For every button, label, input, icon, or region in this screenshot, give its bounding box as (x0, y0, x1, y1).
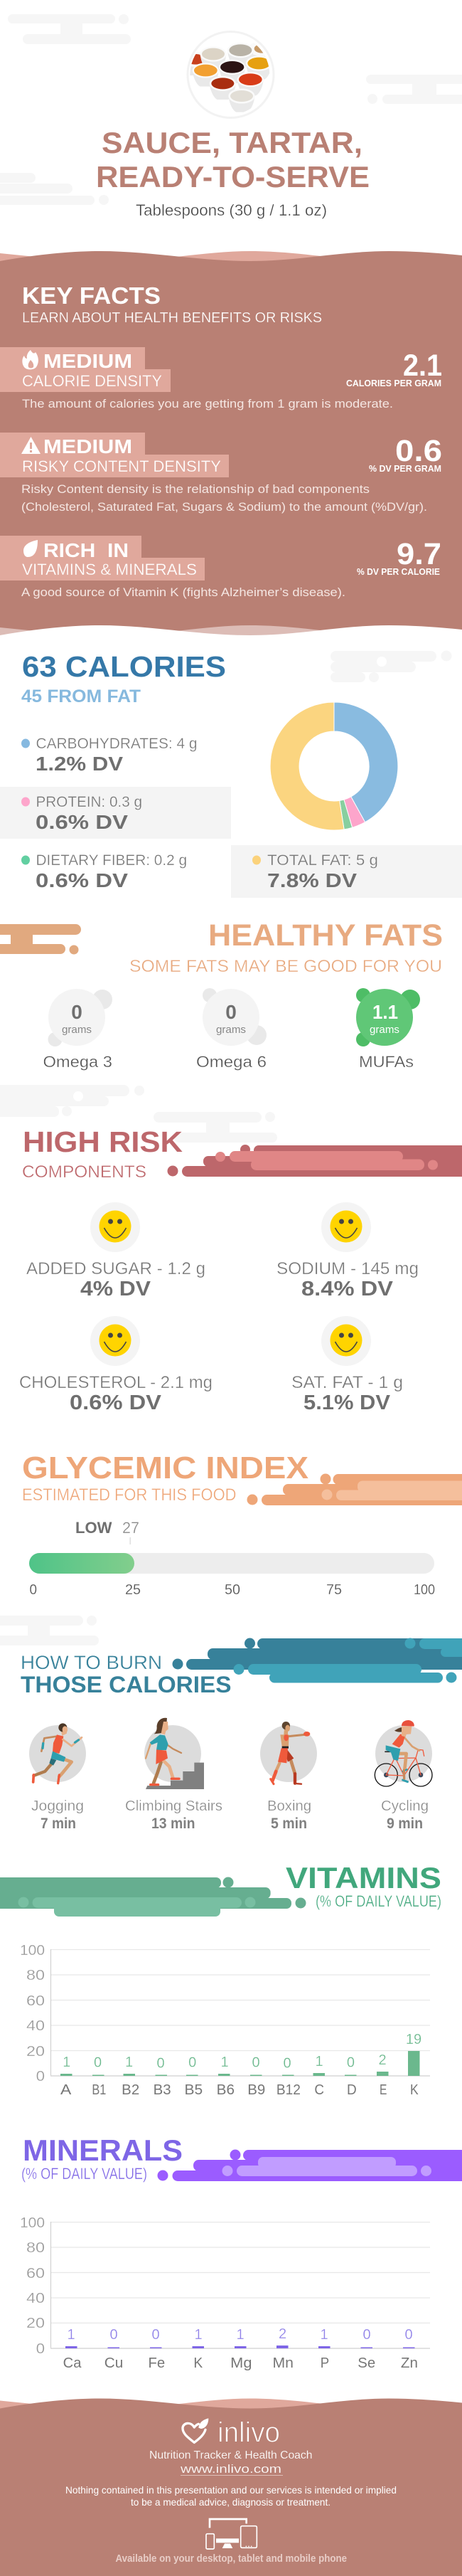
heading: minerals: MINERALS (23, 2134, 183, 2167)
component: cholesterol: CHOLESTEROL - 2.1 mg (19, 1373, 213, 1392)
bar chart: vitamins: K (410, 2082, 419, 2098)
background cloud: burn calories (0, 1616, 99, 1645)
subheading: LEARN ABOUT HEALTH BENEFITS OR RISKS (22, 310, 322, 326)
bar chart: vitamins: 0 (252, 2055, 260, 2071)
bar chart: minerals: P (321, 2355, 329, 2371)
description (21, 482, 427, 514)
bar chart: vitamins: 0 (156, 2056, 165, 2072)
bar chart: minerals: Cu (104, 2355, 123, 2371)
gauge: glycemic index: 75 (326, 1582, 342, 1598)
bar chart: minerals: 100 (20, 2215, 45, 2231)
description: A good source of Vitamin K (fights Alzheimer’s disease). (21, 585, 345, 599)
bar chart: vitamins: 2 (378, 2052, 387, 2068)
unit: dv per gram: % DV PER GRAM (369, 463, 441, 474)
heading: key facts: KEY FACTS (22, 282, 161, 309)
tagline: Nutrition Tracker & Health Coach (149, 2449, 313, 2461)
component: added sugar (26, 1202, 205, 1300)
title: READY-TO-SERVE (96, 160, 370, 194)
decorative bar: healthy fats (0, 924, 81, 955)
bar chart: minerals: 1 (320, 2327, 328, 2343)
decorative bars: minerals (158, 2150, 462, 2181)
bar chart: vitamins: B6 (217, 2082, 235, 2098)
component: added sugar: ADDED SUGAR - 1.2 g (26, 1259, 205, 1278)
bar chart: vitamins: 0 (283, 2056, 291, 2072)
component: saturated fat: 5.1% DV (303, 1392, 391, 1414)
bar chart: minerals: 40 (26, 2291, 45, 2306)
subheading: some fats: SOME FATS MAY BE GOOD FOR YOU (129, 957, 442, 976)
bar chart: vitamins: A (60, 2082, 72, 2098)
icon: warning triangle (21, 437, 41, 454)
fat: omega 3: Omega 3 (43, 1053, 112, 1071)
bar chart: vitamins: 1 (63, 2055, 70, 2070)
bar chart: vitamins: 0 (347, 2055, 355, 2071)
macro: total fat: 7.8% DV (267, 869, 357, 891)
component: saturated fat: SAT. FAT - 1 g (291, 1373, 403, 1392)
component: sodium: 8.4% DV (301, 1278, 394, 1300)
bar chart: vitamins: 1 (220, 2055, 229, 2070)
gauge: glycemic index: 25 (125, 1582, 141, 1598)
bar chart: vitamins: 1 (315, 2054, 323, 2069)
component: cholesterol: 0.6% DV (70, 1392, 162, 1414)
bar chart: vitamins: B3 (154, 2082, 171, 2098)
decorative bars: vitamins (0, 1877, 306, 1917)
heading: how to burn those calories (21, 1652, 232, 1697)
bar chart: minerals: 0 (151, 2327, 160, 2343)
bar chart: vitamins: B12 (276, 2082, 301, 2098)
bar chart: vitamins: 40 (26, 2018, 45, 2034)
bar chart: minerals: Ca (63, 2355, 82, 2371)
exercise: boxing (260, 1722, 317, 1784)
gauge: glycemic index: LOW (75, 1519, 112, 1537)
macro: total fat (231, 845, 462, 898)
decorative bars: burn calories (172, 1638, 462, 1683)
icon: leaf (23, 540, 38, 557)
macro: carbohydrates: 1.2% DV (36, 753, 123, 775)
bar chart: minerals: K (193, 2355, 203, 2371)
exercise labels: 5 min (271, 1816, 307, 1832)
exercise labels: 9 min (387, 1816, 423, 1832)
macro: protein: PROTEIN: 0.3 g (36, 794, 142, 810)
bar chart: minerals: Zn (401, 2355, 418, 2371)
bottom wave of key facts (0, 625, 462, 644)
fat: omega 3 (43, 989, 112, 1071)
disclaimer: Nothing contained in this presentation and our services is intended or implied (65, 2484, 397, 2496)
macro: total fat: TOTAL FAT: 5 g (267, 852, 378, 869)
bar chart: vitamins: B5 (185, 2082, 203, 2098)
fat: omega 3: grams (62, 1024, 92, 1036)
heading: how to burn those calories: THOSE CALORIES (21, 1672, 232, 1697)
fat: mufas (356, 988, 420, 1071)
decorative bars: high risk (168, 1145, 462, 1177)
panel: key facts (0, 251, 462, 640)
component: sodium: SODIUM - 145 mg (276, 1259, 419, 1278)
bar chart: minerals: Se (358, 2355, 375, 2371)
description: Risky Content density is the relationship of bad components (21, 482, 370, 496)
fat: mufas: grams (370, 1024, 399, 1036)
rating: medium: MEDIUM (43, 435, 132, 457)
fact: vitamins and minerals (0, 536, 441, 599)
bar chart: minerals: 1 (236, 2327, 245, 2343)
subheading: estimated: ESTIMATED FOR THIS FOOD (22, 1485, 236, 1505)
bar chart: vitamins: 0 (36, 2069, 45, 2084)
rating: medium: MEDIUM (43, 350, 132, 372)
component: cholesterol (19, 1316, 213, 1414)
value: 2.1: 2.1 (403, 349, 442, 383)
heading: glycemic index: GLYCEMIC INDEX (22, 1451, 308, 1485)
bar chart: minerals: 0 (362, 2327, 371, 2343)
gauge: glycemic index: 27 (122, 1519, 139, 1537)
bar chart: vitamins (20, 1943, 430, 2098)
background clouds: header (0, 14, 462, 205)
bar chart: vitamins: C (314, 2082, 324, 2098)
unit: dv per calorie: % DV PER CALORIE (357, 566, 440, 577)
label: risky content density: RISKY CONTENT DENSITY (22, 457, 221, 475)
bar chart: vitamins: 0 (188, 2055, 196, 2071)
bar chart: minerals: Mn (273, 2355, 294, 2371)
exercise labels (31, 1798, 429, 1832)
bar chart: minerals: 1 (67, 2327, 75, 2343)
heading: 63 calories: 63 CALORIES (22, 650, 226, 683)
bar chart: vitamins: 60 (26, 1993, 45, 2009)
bar chart: minerals: Fe (148, 2355, 165, 2371)
bar chart: minerals: 20 (26, 2316, 45, 2331)
bar chart: minerals: 0 (109, 2327, 118, 2343)
heading: vitamins: VITAMINS (286, 1861, 441, 1894)
exercise labels: 13 min (151, 1816, 195, 1832)
bar chart: vitamins: B9 (247, 2082, 265, 2098)
gauge: glycemic index: 50 (225, 1582, 240, 1598)
macro: dietary fiber: DIETARY FIBER: 0.2 g (36, 852, 187, 869)
subheading: components: COMPONENTS (22, 1162, 146, 1182)
value: 9.7: 9.7 (397, 537, 441, 571)
bar chart: minerals: 60 (26, 2266, 45, 2281)
icon: flame (22, 350, 38, 369)
component: saturated fat (291, 1316, 403, 1414)
subheading: percent of daily value: (% OF DAILY VALUE) (21, 2165, 147, 2183)
component: added sugar: 4% DV (80, 1278, 151, 1300)
macro: dietary fiber: 0.6% DV (36, 869, 128, 891)
exercise labels: Cycling (381, 1798, 429, 1814)
macro: protein: 0.6% DV (36, 811, 128, 833)
logo wordmark: inlivo (217, 2417, 280, 2449)
bar chart: minerals: 1 (194, 2327, 203, 2343)
description: (Cholesterol, Saturated Fat, Sugars & Sodium) to the amount (%DV/gr). (21, 500, 427, 514)
fat: omega 6: Omega 6 (196, 1053, 267, 1071)
gauge: glycemic index (29, 1519, 435, 1598)
exercise: jogging (29, 1723, 86, 1783)
decorative bars: glycemic index (247, 1474, 462, 1505)
bar chart: vitamins: 0 (94, 2055, 102, 2071)
exercise labels: Jogging (31, 1798, 84, 1814)
fat: omega 6: 0 (225, 1001, 237, 1023)
availability note: Available on your desktop, tablet and mobile phone (115, 2553, 347, 2565)
heading: healthy fats: HEALTHY FATS (208, 918, 443, 953)
macro: dietary fiber (21, 852, 187, 891)
fat: omega 3: 0 (71, 1001, 82, 1023)
background clouds: high risk (0, 1085, 277, 1143)
bar chart: minerals: 0 (404, 2327, 413, 2343)
heading: high risk: HIGH RISK (23, 1125, 183, 1158)
bar chart: vitamins: 80 (26, 1968, 45, 1983)
exercise labels: 7 min (41, 1816, 76, 1832)
bar chart: vitamins: 19 (406, 2032, 421, 2047)
bar chart: vitamins: B1 (92, 2082, 106, 2098)
bar chart: vitamins: D (347, 2082, 357, 2098)
macro: protein (0, 787, 231, 839)
title: SAUCE, TARTAR, (102, 126, 362, 159)
title (96, 126, 370, 194)
macro: carbohydrates: CARBOHYDRATES: 4 g (36, 736, 198, 752)
icon: devices (206, 2519, 257, 2549)
description: The amount of calories you are getting from 1 gram is moderate. (22, 397, 393, 410)
component: sodium (276, 1202, 419, 1300)
heading: how to burn those calories: HOW TO BURN (21, 1652, 162, 1673)
rating: rich in: RICH IN (43, 539, 129, 561)
disclaimer (65, 2484, 397, 2508)
bar chart: minerals: 0 (36, 2341, 45, 2357)
website link: www.inlivo.com (180, 2462, 281, 2476)
bar chart: minerals: 80 (26, 2240, 45, 2256)
bar chart: minerals: 2 (279, 2326, 286, 2342)
label: vitamins and minerals: VITAMINS & MINERALS (22, 561, 197, 578)
exercise labels: Climbing Stairs (125, 1798, 222, 1814)
exercise: climbing stairs (144, 1718, 204, 1789)
macro: carbohydrates (21, 736, 198, 775)
serving size subtitle: Tablespoons (30 g / 1.1 oz) (136, 201, 327, 219)
bar chart: vitamins: 1 (125, 2055, 133, 2070)
donut chart (270, 702, 398, 830)
fat: mufas: MUFAs (359, 1053, 414, 1071)
exercise labels: Boxing (267, 1798, 311, 1814)
disclaimer: to be a medical advice, diagnosis or treatment. (131, 2496, 331, 2508)
unit: calories per gram: CALORIES PER GRAM (346, 378, 441, 388)
bar chart: vitamins: 100 (20, 1943, 45, 1958)
food photo: sauce bowls in a ring (182, 31, 275, 118)
fat: omega 6: grams (216, 1024, 246, 1036)
value: 0.6: 0.6 (395, 434, 442, 468)
bar chart: vitamins: B2 (122, 2082, 139, 2098)
gauge: glycemic index: 0 (30, 1582, 37, 1598)
bar chart: vitamins: 20 (26, 2044, 45, 2060)
bar chart: minerals (20, 2215, 430, 2371)
label: calorie density: CALORIE DENSITY (22, 372, 162, 390)
exercise: cycling (375, 1720, 432, 1786)
fact: risky content density (0, 433, 442, 514)
fat: omega 6 (196, 988, 267, 1071)
panel: footer (0, 2399, 462, 2576)
bar chart: minerals: Mg (230, 2355, 252, 2371)
gauge: glycemic index: 100 (414, 1582, 435, 1598)
logo: inlivo heart (183, 2418, 208, 2442)
bar chart: vitamins: E (380, 2082, 387, 2098)
background cloud: calories (331, 650, 452, 682)
fact: calorie density (0, 347, 442, 410)
subheading: 45 from fat: 45 FROM FAT (21, 687, 141, 706)
fat: mufas: 1.1 (372, 1001, 398, 1023)
